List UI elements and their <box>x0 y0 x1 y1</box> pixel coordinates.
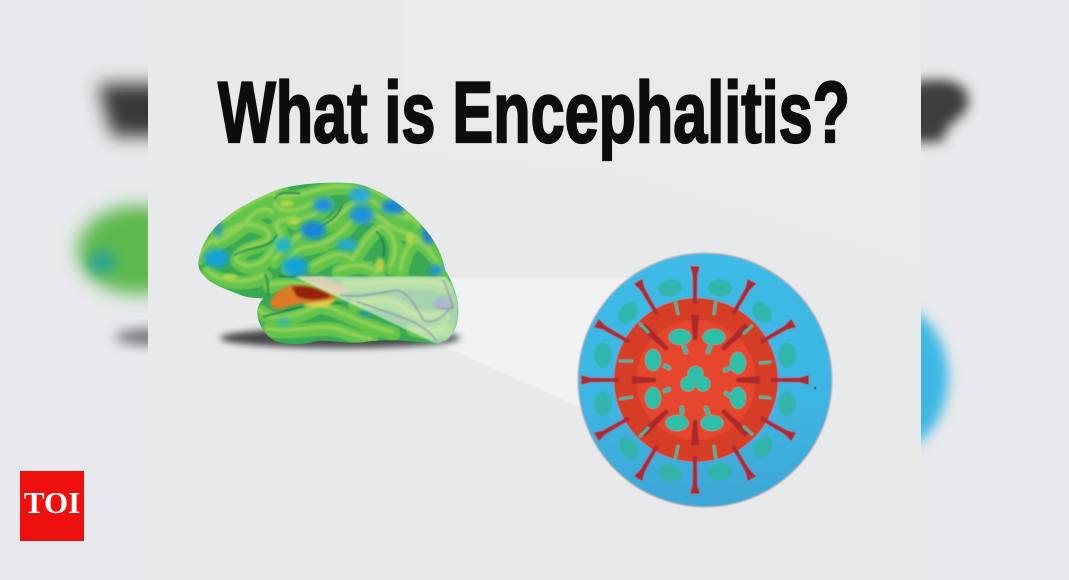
blue patches <box>204 187 443 326</box>
blurred teal patch <box>88 250 116 274</box>
blurred brain left <box>78 206 198 294</box>
virus outer disc <box>578 253 832 507</box>
blurred right band <box>822 80 968 454</box>
blob right lower <box>730 387 746 409</box>
blurred title fragment left <box>98 84 170 136</box>
blob left lower <box>645 387 661 409</box>
brain <box>198 183 458 344</box>
hot spot <box>270 285 338 309</box>
inner teal blobs <box>645 329 746 431</box>
logo box <box>20 471 84 541</box>
spike 120 <box>758 414 796 441</box>
gyri highlight <box>199 186 445 338</box>
spike 30 <box>729 279 756 317</box>
pale magnified section <box>295 277 458 344</box>
pale pink streak <box>297 277 353 293</box>
blurred virus disc <box>822 302 948 454</box>
outer envelope blobs <box>594 278 796 483</box>
brain surface folds <box>199 186 447 340</box>
spike 0 <box>690 266 700 304</box>
gyri body <box>200 188 447 340</box>
dark sulci <box>235 193 384 317</box>
yellow highlights <box>223 200 414 308</box>
blob left upper <box>645 349 661 371</box>
thin outer stalks <box>620 300 770 460</box>
virus red core <box>614 298 778 462</box>
spike 180 <box>690 456 700 494</box>
dark speck <box>814 387 816 389</box>
spike 210 <box>634 443 661 481</box>
outer core ring shade <box>625 309 767 451</box>
blurred left band <box>78 84 198 345</box>
pale section veins <box>340 280 453 342</box>
virus illustration <box>578 253 832 507</box>
inner spikes <box>632 315 760 445</box>
small teal stalks <box>665 347 730 413</box>
lighter diagonal wash top right <box>405 0 921 262</box>
spikes <box>581 266 809 494</box>
centre trefoil <box>680 366 710 392</box>
blurred shadow left <box>115 329 195 345</box>
blob right upper <box>730 352 746 374</box>
spike 90 <box>771 375 809 385</box>
lilac patch <box>432 297 451 309</box>
blob lower left <box>666 415 688 431</box>
spike 330 <box>634 279 661 317</box>
spike 150 <box>729 443 756 481</box>
infographic canvas <box>20 68 977 541</box>
central panel <box>148 0 921 580</box>
blob upper left <box>668 329 692 345</box>
magnifying light beam <box>437 278 660 412</box>
TOI logo <box>20 471 84 541</box>
brain shadow <box>220 328 460 348</box>
blob upper right <box>702 329 726 345</box>
blob lower right <box>700 415 724 431</box>
brain base <box>198 183 458 344</box>
spike 60 <box>758 319 796 346</box>
spike 300 <box>594 319 632 346</box>
logo text: TOI <box>24 485 80 520</box>
blurred question mark <box>905 80 968 142</box>
spike 240 <box>594 414 632 441</box>
spike 270 <box>581 375 619 385</box>
